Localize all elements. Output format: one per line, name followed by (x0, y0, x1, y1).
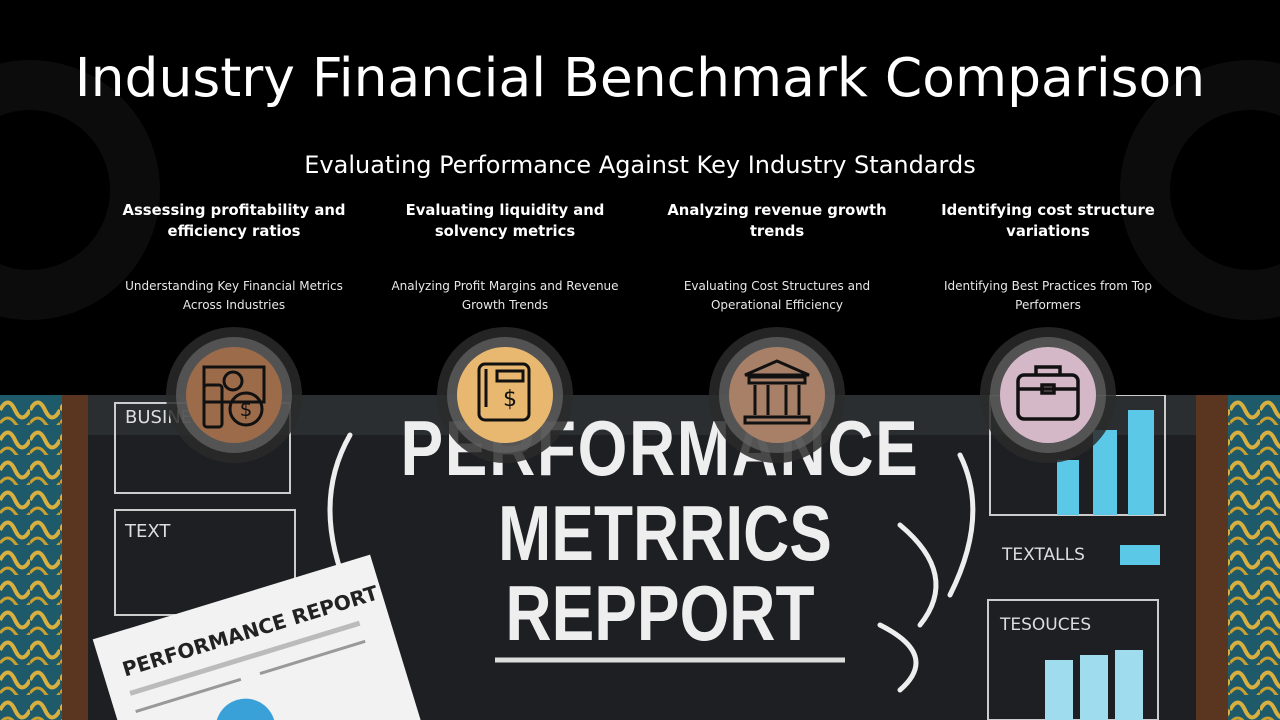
chalkboard image: TESOUCES (999, 615, 1091, 635)
chalkboard image (0, 395, 1280, 720)
heading 2: Evaluating liquidity and solvency metrics (406, 202, 604, 240)
chalk title: METRRICS (498, 490, 832, 577)
icon 4: briefcase (980, 327, 1116, 463)
right chalk boxes (990, 395, 1165, 515)
icon 2: book (437, 327, 573, 463)
subtitle: Evaluating Performance Against Key Industry Standards (304, 151, 976, 179)
heading 3: Analyzing revenue growth trends (667, 202, 887, 240)
desc 3: Evaluating Cost Structures and Operational Efficiency (684, 279, 870, 312)
heading 1: Assessing profitability and efficiency ratios (123, 202, 345, 240)
paper report (93, 555, 429, 720)
icon 1: money (166, 327, 302, 463)
icon 1: money: $ (240, 397, 252, 421)
background decoration rings (0, 60, 1280, 320)
left chalk boxes (115, 403, 290, 493)
heading 4: Identifying cost structure variations (941, 202, 1155, 240)
chalk title: REPPORT (505, 570, 815, 657)
chalkboard image: TEXTALLS (1001, 545, 1085, 565)
paper report: PERFORMANCE REPORT (119, 581, 381, 681)
title: Industry Financial Benchmark Comparison (75, 46, 1205, 109)
icon 3: bank (709, 327, 845, 463)
chalk title: PERFORMANCE (401, 405, 919, 492)
chalk title (401, 405, 919, 660)
icon 2: book: $ (503, 387, 517, 412)
chalkboard image: BUSINE (125, 407, 192, 428)
desc 4: Identifying Best Practices from Top Performers (944, 279, 1152, 312)
chalkboard image: TEXT (124, 521, 171, 542)
desc 1: Understanding Key Financial Metrics Across Industries (125, 279, 343, 312)
desc 2: Analyzing Profit Margins and Revenue Growth Trends (391, 279, 619, 312)
